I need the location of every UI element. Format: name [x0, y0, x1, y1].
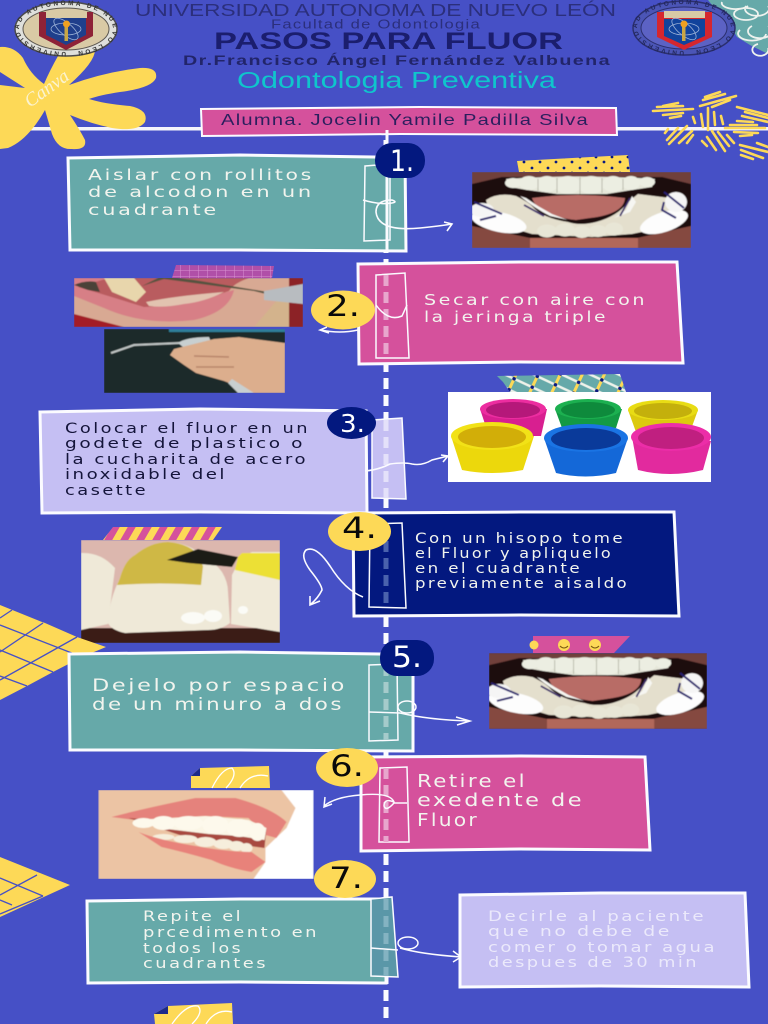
step text: de un minuro a dos [92, 695, 344, 715]
cup: front blue [544, 424, 628, 476]
decoration: yellow grid, lower left [0, 857, 70, 917]
cup: front yellow [451, 422, 534, 473]
arrow: step 5 to photo [398, 701, 470, 725]
cup: back yellow [628, 400, 698, 432]
tape strip [376, 273, 409, 358]
step text: la cucharita de acero [65, 452, 308, 468]
step text: godete de plastico o [65, 436, 305, 452]
student name banner [201, 107, 617, 136]
photo: air syringe in mouth [74, 276, 303, 327]
cup: back magenta [480, 399, 547, 436]
badge: step 4 [328, 511, 391, 551]
badge: step 6 [316, 748, 378, 787]
step text [424, 291, 647, 326]
step text: cuadrante [88, 201, 219, 219]
cup: back green [555, 399, 622, 428]
decoration: yellow grid, left [0, 605, 106, 700]
badge: step 6: 6. [330, 749, 364, 783]
tape: pink with smiley faces [530, 636, 630, 653]
step text [415, 531, 629, 592]
step text: en el cuadrante [415, 561, 582, 577]
step text [92, 676, 347, 715]
tape strip: step 3 [372, 418, 406, 499]
arrow: step 7 to note [398, 937, 461, 962]
tape: pink and yellow stripes [103, 527, 222, 540]
step text [65, 421, 310, 499]
photo: fluoride applied on tooth [81, 540, 280, 643]
step text: Con un hisopo tome [415, 531, 625, 547]
arrow: step 1 to photo [363, 200, 452, 231]
step 4: text panel [353, 512, 679, 616]
step text: exedente de [417, 790, 584, 811]
tape strip [369, 523, 406, 608]
step 2: text panel [358, 262, 683, 364]
step text: prcedimento en [143, 925, 319, 941]
tape: yellow with white curves [191, 766, 270, 788]
note text: comer o tomar agua [488, 940, 717, 956]
photo: smile after treatment [98, 790, 314, 879]
badge: step 5: 5. [392, 640, 422, 674]
photo: isolated mouth with cotton rolls [470, 172, 691, 248]
note text: que no debe de [488, 924, 672, 940]
step text: el Fluor y apliquelo [415, 546, 613, 562]
badge: step 1 [375, 143, 425, 178]
decoration: yellow hatch marks, right [653, 92, 768, 159]
tape strip [371, 897, 398, 977]
step text: todos los [143, 941, 243, 957]
note text [488, 909, 717, 971]
step text [88, 166, 314, 219]
title: university: UNIVERSIDAD AUTONOMA DE NUEVO LEÓN [135, 0, 616, 20]
note text: despues de 30 min [488, 955, 699, 971]
note text: Decirle al paciente [488, 909, 706, 925]
badge: step 1: 1. [390, 144, 414, 178]
arrow: step 3 to photo [365, 455, 448, 471]
cup: front magenta [631, 423, 711, 474]
step text: Fluor [417, 810, 479, 831]
step text: Secar con aire con [424, 291, 647, 309]
badge: step 7 [314, 860, 376, 898]
badge: step 3: 3. [340, 409, 365, 438]
subtitle: professor: Dr.Francisco Ángel Fernández Valbuena [183, 52, 611, 68]
student name: Alumna. Jocelin Yamile Padilla Silva [221, 112, 589, 129]
photo: hand holding triple syringe [104, 329, 285, 393]
vertical timeline line [384, 140, 388, 1024]
step text: de alcodon en un [88, 183, 314, 201]
seal: left university emblem: UNIVERSIDAD AUTONOMA DE NUEVO LEON [14, 0, 118, 56]
step text: la jeringa triple [424, 308, 608, 326]
subtitle: subject: Odontologia Preventiva [237, 67, 556, 93]
step text: Retire el [417, 771, 527, 792]
step text: Aislar con rollitos [88, 166, 314, 184]
seal: right university emblem: UNIVERSIDAD AUTONOMA DE NUEVO LEON [632, 0, 736, 56]
badge: step 7: 7. [329, 861, 363, 895]
step 6: text panel [361, 756, 650, 851]
step text: Repite el [143, 909, 243, 925]
badge: step 3 [327, 407, 376, 439]
tape: purple grid [172, 265, 274, 278]
tape: teal pattern [497, 374, 626, 392]
step text: previamente aisaldo [415, 576, 629, 592]
step text: cuadrantes [143, 956, 268, 972]
step 1: text panel [68, 155, 406, 251]
step text: Dejelo por espacio [92, 676, 347, 696]
badge: step 5 [380, 640, 434, 676]
watermark: Canva: Canva [21, 66, 73, 112]
arrow: step 4 to photo [304, 549, 363, 605]
tape strip [379, 767, 409, 842]
decoration: teal leaf with rings, top right [708, 0, 768, 56]
step text [143, 909, 319, 972]
arrow: step 2 to photo [320, 327, 358, 333]
step 3: text panel [40, 409, 367, 513]
tape strip [364, 164, 390, 241]
timeline segment through step 1 [386, 130, 388, 252]
badge: step 2: 2. [326, 289, 360, 323]
tape: yellow bottom [154, 1003, 233, 1024]
badge: step 4: 4. [342, 511, 377, 545]
photo: colorful plastic cups [448, 392, 711, 482]
tape: dotted yellow [517, 155, 630, 172]
horizontal timeline line [0, 127, 768, 130]
subtitle: faculty: Facultad de Odontologia [271, 16, 481, 32]
header titles [135, 0, 616, 93]
step text [417, 771, 584, 831]
note panel: after care [460, 893, 749, 987]
photo: mouth after fluoride [487, 653, 707, 729]
arrow: step 6 to photo [324, 794, 407, 808]
step text: casette [65, 483, 148, 499]
tape strip [369, 664, 398, 741]
decoration: yellow flower [0, 47, 156, 149]
step text: Colocar el fluor en un [65, 421, 310, 437]
badge: step 2 [311, 289, 375, 330]
step text: inoxidable del [65, 467, 227, 483]
step 7: text panel [87, 897, 398, 983]
step 5: text panel [69, 652, 413, 751]
heading: main title: PASOS PARA FLUOR [214, 28, 563, 55]
